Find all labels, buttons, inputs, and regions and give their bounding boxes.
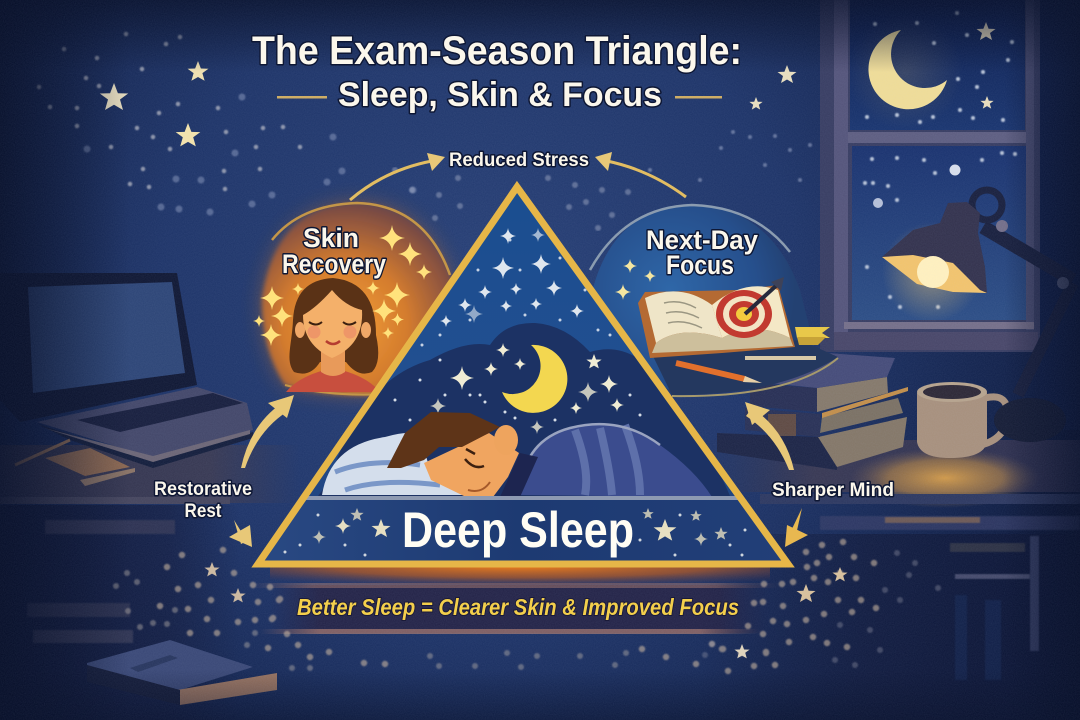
dark furniture under left desk xyxy=(0,505,240,720)
book on lower left xyxy=(87,640,277,705)
label: Skin Recovery xyxy=(282,223,386,279)
icon: woman with closed eyes xyxy=(286,278,380,392)
label: Sharper Mind: Sharper Mind xyxy=(772,480,894,501)
caption band xyxy=(265,500,746,560)
icon: crescent moon in window xyxy=(868,30,947,109)
panel: skin recovery bubble xyxy=(253,203,452,395)
label: Restorative Rest: Rest xyxy=(184,501,222,522)
orange glow under triangle xyxy=(270,566,770,596)
label: Skin Recovery: Skin xyxy=(303,223,359,253)
stars in upper triangle xyxy=(422,228,610,345)
arrow: skin recovery to reduced stress xyxy=(350,153,445,200)
label: Skin Recovery: Recovery xyxy=(282,249,386,279)
desk, books and lamp on the right xyxy=(700,190,1080,720)
tagline: Better Sleep = Clearer Skin & Improved Focus xyxy=(297,594,739,620)
title xyxy=(252,29,742,114)
icon: gold sparkles xyxy=(253,225,432,346)
upper left star field xyxy=(39,34,810,212)
label: Next-Day Focus: Focus xyxy=(666,250,734,280)
lit lampshade opening xyxy=(882,255,987,293)
panel: next-day focus bubble xyxy=(590,205,838,396)
sleeping boy xyxy=(387,412,519,497)
desk lamp xyxy=(882,190,1073,442)
coffee mug xyxy=(917,382,1007,458)
label: Restorative Rest: Restorative xyxy=(154,479,252,500)
moon and stars in cloud xyxy=(395,343,640,434)
arrow: rest up to skin recovery xyxy=(241,395,294,468)
title: The Exam-Season Triangle: xyxy=(252,29,742,73)
title: Deep Sleep: Deep Sleep xyxy=(402,502,634,558)
label: Next-Day Focus: Next-Day xyxy=(646,225,758,255)
icon: pen and pencil xyxy=(676,358,816,383)
laptop on desk xyxy=(0,273,300,504)
pillow xyxy=(322,433,465,495)
stars around triangle xyxy=(395,170,628,228)
label: Next-Day Focus xyxy=(646,225,758,280)
stack of books xyxy=(717,353,908,470)
arrow: sharper mind down to triangle xyxy=(785,508,808,547)
icon: stars near focus label xyxy=(615,259,656,300)
icon: bullseye target xyxy=(716,290,772,338)
label: Reduced Stress: Reduced Stress xyxy=(449,150,589,171)
arrow: next-day focus to reduced stress xyxy=(595,152,686,197)
dark cloud xyxy=(318,323,730,496)
label: Restorative Rest xyxy=(154,479,252,522)
panel: deep sleep triangle xyxy=(240,187,800,567)
lower star drifts xyxy=(116,542,938,671)
arrow: rest down to triangle xyxy=(229,520,252,547)
title: Sleep, Skin & Focus xyxy=(338,76,662,114)
band stars xyxy=(285,508,745,555)
blanket xyxy=(520,424,712,497)
window with moon xyxy=(820,0,1080,430)
icon: open book with target and arrow xyxy=(638,277,830,358)
arrow: sharper mind up to next-day focus xyxy=(745,402,794,470)
